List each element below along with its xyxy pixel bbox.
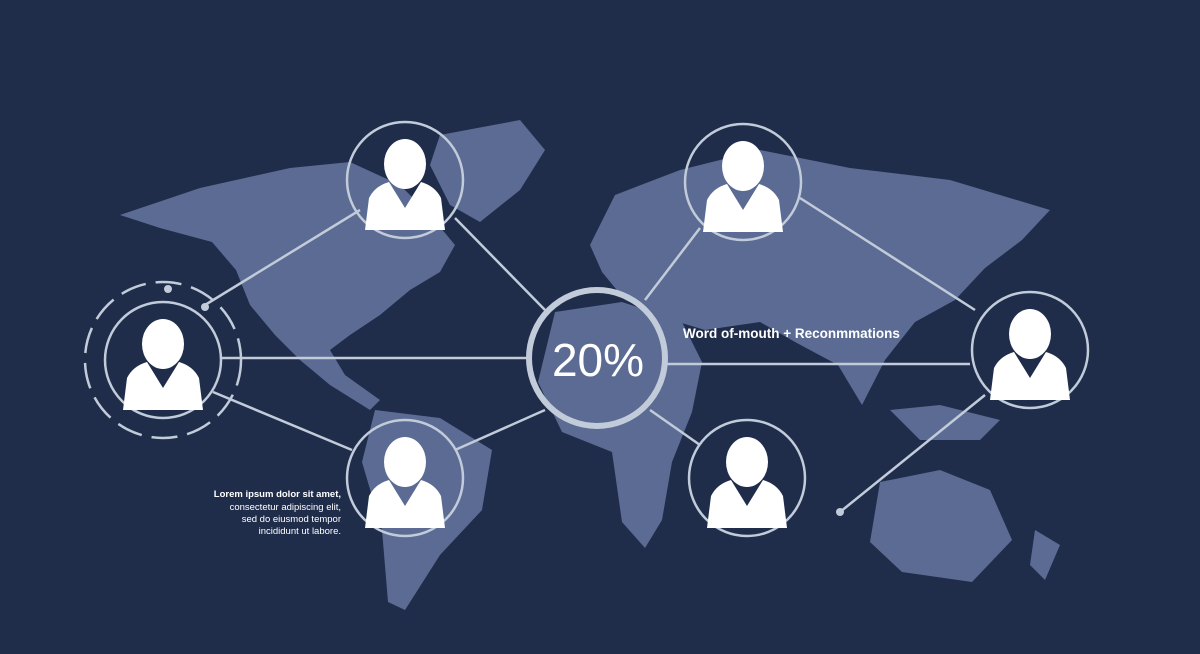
caption text: consectetur adipiscing elit,: [230, 502, 341, 513]
caption text: sed do eiusmod tempor: [242, 514, 341, 525]
caption text: [214, 489, 341, 537]
node dots: [164, 285, 844, 516]
caption text: Lorem ipsum dolor sit amet,: [214, 489, 341, 500]
caption text: incididunt ut labore.: [259, 526, 341, 537]
dashed ring: left node: [85, 282, 241, 438]
center stat circle: 20%: [552, 334, 644, 386]
connection lines: [205, 198, 985, 512]
center stat circle: [529, 290, 665, 426]
world map: [120, 120, 1060, 610]
person nodes: [105, 122, 1088, 536]
label: Word of-mouth + Reconmmations: [683, 326, 900, 341]
